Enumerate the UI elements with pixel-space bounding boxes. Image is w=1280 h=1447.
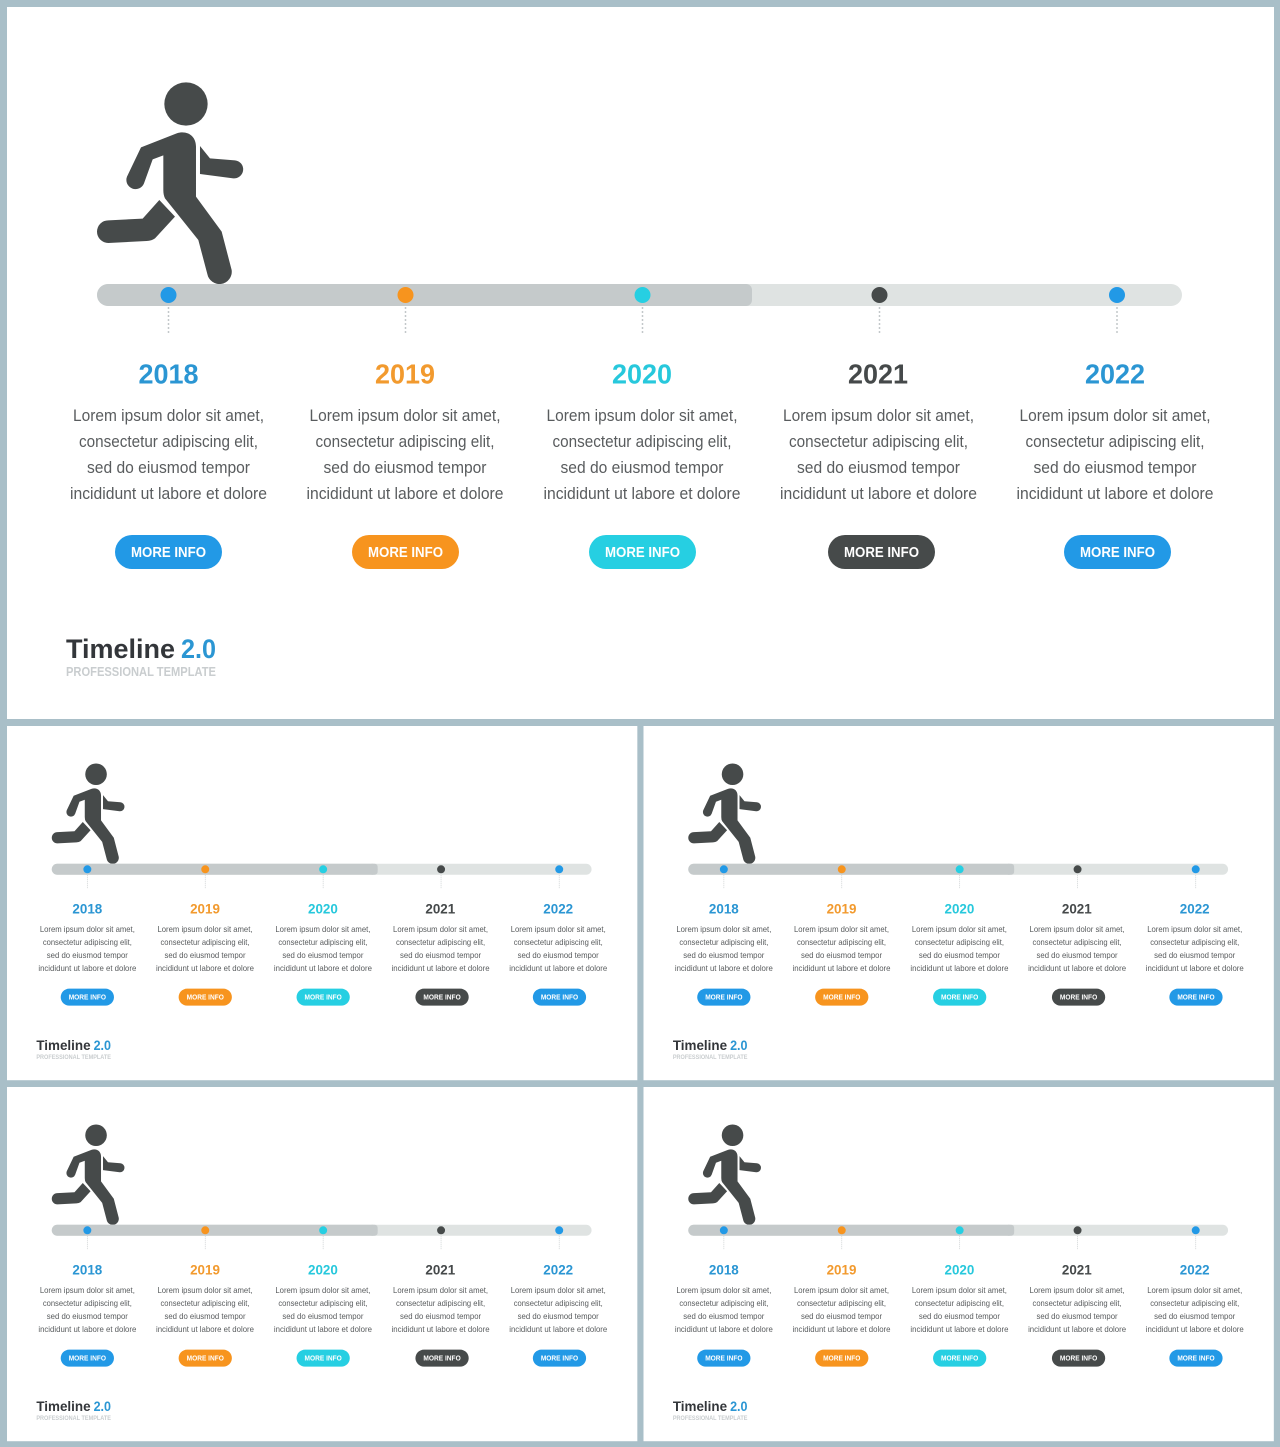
column: 2019: incididunt ut labore et dolore	[156, 1325, 254, 1334]
column: 2019: Lorem ipsum dolor sit amet,	[794, 925, 889, 934]
column: 2018: sed do eiusmod tempor	[683, 951, 765, 960]
column: 2021: consectetur adipiscing elit,	[396, 1299, 485, 1308]
column: 2020	[910, 900, 1009, 1006]
column: 2019: 2019	[827, 900, 857, 916]
title: 2.0	[94, 1399, 111, 1414]
title: PROFESSIONAL TEMPLATE	[66, 665, 216, 679]
column: 2020: MORE INFO	[941, 1354, 979, 1363]
column: 2018: MORE INFO	[69, 1354, 106, 1363]
title: 2.0	[730, 1038, 747, 1053]
column: 2018: incididunt ut labore et dolore	[38, 1325, 137, 1334]
column: 2022: 2022	[1180, 900, 1210, 916]
column: 2019: incididunt ut labore et dolore	[306, 485, 504, 503]
column: 2022	[1146, 1261, 1244, 1367]
column: 2021	[780, 358, 977, 569]
column: 2019: consectetur adipiscing elit,	[160, 1299, 250, 1308]
panel: small slide bottom right	[644, 1087, 1274, 1441]
column: 2021: incididunt ut labore et dolore	[1028, 964, 1126, 973]
column: 2020: Lorem ipsum dolor sit amet,	[275, 925, 370, 934]
column: 2021: incididunt ut labore et dolore	[1028, 1325, 1126, 1334]
column: 2021: sed do eiusmod tempor	[1037, 1312, 1118, 1321]
column: 2020: Lorem ipsum dolor sit amet,	[912, 925, 1007, 934]
column: 2021: Lorem ipsum dolor sit amet,	[783, 407, 974, 425]
column: 2022: Lorem ipsum dolor sit amet,	[511, 925, 606, 934]
column: 2019	[156, 1261, 254, 1367]
column: 2020: consectetur adipiscing elit,	[915, 1299, 1004, 1308]
column: 2021: MORE INFO	[1060, 993, 1098, 1002]
column: 2020: 2020	[944, 900, 975, 916]
column: 2021: MORE INFO	[423, 993, 461, 1002]
column: 2019	[306, 358, 504, 569]
panel: small slide top left	[7, 726, 637, 1080]
column: 2018: Lorem ipsum dolor sit amet,	[676, 1286, 771, 1295]
column: 2020: sed do eiusmod tempor	[282, 951, 364, 960]
column: 2020	[544, 358, 740, 569]
column: 2018: consectetur adipiscing elit,	[43, 1299, 132, 1308]
title	[36, 1038, 111, 1061]
column: 2018: sed do eiusmod tempor	[87, 459, 250, 477]
column: 2019: 2019	[190, 1261, 220, 1277]
column: 2020	[274, 900, 372, 1006]
column: 2018	[38, 900, 137, 1006]
column: 2020: consectetur adipiscing elit,	[915, 938, 1004, 947]
column: 2021: MORE INFO	[844, 545, 919, 561]
column: 2022: incididunt ut labore et dolore	[1146, 1325, 1244, 1334]
column: 2021: incididunt ut labore et dolore	[392, 964, 490, 973]
column: 2019: consectetur adipiscing elit,	[316, 433, 494, 451]
column: 2018	[38, 1261, 137, 1367]
column: 2018: incididunt ut labore et dolore	[675, 964, 773, 973]
column: 2020: consectetur adipiscing elit,	[278, 938, 367, 947]
column: 2021: 2021	[848, 358, 908, 390]
column: 2021: MORE INFO	[1060, 1354, 1098, 1363]
timeline bar	[688, 864, 1228, 889]
column: 2022: Lorem ipsum dolor sit amet,	[511, 1286, 606, 1295]
column: 2020: MORE INFO	[605, 545, 680, 561]
column: 2019: sed do eiusmod tempor	[324, 459, 487, 477]
column: 2021: incididunt ut labore et dolore	[392, 1325, 490, 1334]
title: PROFESSIONAL TEMPLATE	[36, 1054, 111, 1061]
column: 2021: sed do eiusmod tempor	[797, 459, 960, 477]
column: 2020: incididunt ut labore et dolore	[910, 964, 1009, 973]
column: 2022: MORE INFO	[1177, 993, 1215, 1002]
column: 2019: incididunt ut labore et dolore	[793, 1325, 891, 1334]
column: 2021: 2021	[1062, 900, 1092, 916]
column: 2020: sed do eiusmod tempor	[919, 951, 1000, 960]
column: 2019: incididunt ut labore et dolore	[793, 964, 891, 973]
column: 2021: consectetur adipiscing elit,	[789, 433, 968, 451]
column: 2018: MORE INFO	[131, 545, 206, 561]
title: 2.0	[730, 1399, 747, 1414]
column: 2018: consectetur adipiscing elit,	[43, 938, 132, 947]
column: 2018: Lorem ipsum dolor sit amet,	[73, 407, 264, 425]
panel: small slide top right	[644, 726, 1274, 1080]
column: 2022: Lorem ipsum dolor sit amet,	[1147, 1286, 1242, 1295]
column: 2018: consectetur adipiscing elit,	[679, 1299, 768, 1308]
column: 2022	[1016, 358, 1214, 569]
column: 2021: Lorem ipsum dolor sit amet,	[393, 1286, 488, 1295]
column: 2022	[509, 1261, 608, 1367]
column: 2018: MORE INFO	[705, 1354, 743, 1363]
column: 2019: Lorem ipsum dolor sit amet,	[157, 925, 253, 934]
column: 2021: 2021	[425, 900, 455, 916]
column: 2019: consectetur adipiscing elit,	[160, 938, 250, 947]
column: 2018	[70, 358, 267, 569]
column: 2018: consectetur adipiscing elit,	[679, 938, 768, 947]
column: 2019: MORE INFO	[187, 1354, 224, 1363]
column: 2020: sed do eiusmod tempor	[919, 1312, 1000, 1321]
column: 2020: 2020	[308, 900, 338, 916]
column: 2019: consectetur adipiscing elit,	[797, 938, 886, 947]
column: 2021: consectetur adipiscing elit,	[396, 938, 485, 947]
column: 2021: consectetur adipiscing elit,	[1033, 938, 1122, 947]
column: 2019: MORE INFO	[187, 993, 224, 1002]
timeline bar	[52, 864, 592, 889]
column: 2020: Lorem ipsum dolor sit amet,	[546, 407, 738, 425]
column: 2022: incididunt ut labore et dolore	[1146, 964, 1244, 973]
column: 2021: sed do eiusmod tempor	[400, 951, 481, 960]
column: 2022: sed do eiusmod tempor	[1034, 459, 1197, 477]
title	[673, 1038, 747, 1061]
column: 2022: consectetur adipiscing elit,	[1150, 938, 1239, 947]
column: 2020: MORE INFO	[305, 993, 342, 1002]
column: 2022: MORE INFO	[1080, 545, 1155, 561]
column: 2018	[675, 1261, 773, 1367]
column: 2020: MORE INFO	[941, 993, 979, 1002]
column: 2019: MORE INFO	[823, 993, 861, 1002]
column: 2018: incididunt ut labore et dolore	[675, 1325, 773, 1334]
title: 2.0	[181, 634, 216, 664]
column: 2018: consectetur adipiscing elit,	[79, 433, 258, 451]
column: 2022: incididunt ut labore et dolore	[509, 1325, 608, 1334]
column: 2022: 2022	[1085, 358, 1145, 390]
column: 2022: incididunt ut labore et dolore	[1016, 485, 1214, 503]
icon: running person	[688, 763, 761, 864]
column: 2019: Lorem ipsum dolor sit amet,	[157, 1286, 253, 1295]
title: PROFESSIONAL TEMPLATE	[36, 1415, 111, 1422]
column: 2019	[793, 900, 891, 1006]
column: 2022: 2022	[543, 1261, 573, 1277]
column: 2021: sed do eiusmod tempor	[1037, 951, 1118, 960]
column: 2020: 2020	[944, 1261, 975, 1277]
column: 2020	[274, 1261, 372, 1367]
column: 2021: MORE INFO	[423, 1354, 461, 1363]
column: 2021	[1028, 1261, 1126, 1367]
column: 2021	[1028, 900, 1126, 1006]
column: 2018: 2018	[72, 900, 103, 916]
column: 2018: 2018	[709, 900, 739, 916]
column: 2018: MORE INFO	[69, 993, 106, 1002]
column: 2018: 2018	[709, 1261, 739, 1277]
column: 2019	[793, 1261, 891, 1367]
column: 2022	[509, 900, 608, 1006]
column: 2022: consectetur adipiscing elit,	[514, 938, 603, 947]
column: 2020: sed do eiusmod tempor	[282, 1312, 364, 1321]
timeline bar	[688, 1225, 1228, 1250]
title: 2.0	[94, 1038, 111, 1053]
title: PROFESSIONAL TEMPLATE	[673, 1415, 747, 1422]
column: 2020: Lorem ipsum dolor sit amet,	[275, 1286, 370, 1295]
title	[66, 634, 216, 679]
column: 2019: Lorem ipsum dolor sit amet,	[310, 407, 500, 425]
column: 2019: 2019	[827, 1261, 857, 1277]
column: 2019: incididunt ut labore et dolore	[156, 964, 254, 973]
panel: large timeline slide	[7, 7, 1274, 719]
column: 2019: consectetur adipiscing elit,	[797, 1299, 886, 1308]
column: 2022: 2022	[1180, 1261, 1210, 1277]
column: 2022: 2022	[543, 900, 573, 916]
column: 2020: incididunt ut labore et dolore	[910, 1325, 1009, 1334]
column: 2019: Lorem ipsum dolor sit amet,	[794, 1286, 889, 1295]
column: 2018: Lorem ipsum dolor sit amet,	[676, 925, 771, 934]
icon: running person	[688, 1124, 761, 1225]
column: 2018	[675, 900, 773, 1006]
column: 2020: Lorem ipsum dolor sit amet,	[912, 1286, 1007, 1295]
title: Timeline	[673, 1038, 727, 1053]
icon: running person	[52, 1124, 125, 1225]
title: PROFESSIONAL TEMPLATE	[673, 1054, 747, 1061]
column: 2019: MORE INFO	[368, 545, 443, 561]
column: 2018: 2018	[138, 358, 198, 390]
column: 2018: incididunt ut labore et dolore	[70, 485, 267, 503]
column: 2020: 2020	[308, 1261, 338, 1277]
column: 2020: sed do eiusmod tempor	[560, 459, 724, 477]
column: 2021: Lorem ipsum dolor sit amet,	[1030, 925, 1125, 934]
column: 2018: Lorem ipsum dolor sit amet,	[40, 1286, 135, 1295]
column: 2021: 2021	[1062, 1261, 1092, 1277]
column: 2021: Lorem ipsum dolor sit amet,	[393, 925, 488, 934]
column: 2022: MORE INFO	[541, 1354, 578, 1363]
column: 2020: 2020	[612, 358, 672, 390]
column: 2019: 2019	[190, 900, 220, 916]
title: Timeline	[673, 1399, 727, 1414]
column: 2019: sed do eiusmod tempor	[801, 1312, 882, 1321]
column: 2022: consectetur adipiscing elit,	[1026, 433, 1204, 451]
column: 2018: incididunt ut labore et dolore	[38, 964, 137, 973]
column: 2021: incididunt ut labore et dolore	[780, 485, 977, 503]
column: 2018: sed do eiusmod tempor	[47, 951, 128, 960]
column: 2018: MORE INFO	[705, 993, 743, 1002]
column: 2021: 2021	[425, 1261, 455, 1277]
timeline bar	[52, 1225, 592, 1250]
column: 2022: Lorem ipsum dolor sit amet,	[1147, 925, 1242, 934]
timeline bar	[97, 284, 1182, 334]
column: 2019	[156, 900, 254, 1006]
title: Timeline	[36, 1399, 91, 1414]
column: 2020: incididunt ut labore et dolore	[274, 964, 372, 973]
column: 2020: consectetur adipiscing elit,	[552, 433, 732, 451]
column: 2020	[910, 1261, 1009, 1367]
column: 2022: incididunt ut labore et dolore	[509, 964, 608, 973]
column: 2018: sed do eiusmod tempor	[47, 1312, 128, 1321]
column: 2019: MORE INFO	[823, 1354, 861, 1363]
panel: small slide bottom left	[7, 1087, 637, 1441]
column: 2019: sed do eiusmod tempor	[164, 1312, 246, 1321]
title: Timeline	[66, 634, 175, 664]
column: 2021	[392, 1261, 490, 1367]
column: 2020: consectetur adipiscing elit,	[278, 1299, 367, 1308]
column: 2022: Lorem ipsum dolor sit amet,	[1020, 407, 1210, 425]
column: 2019: sed do eiusmod tempor	[801, 951, 882, 960]
column: 2021: sed do eiusmod tempor	[400, 1312, 481, 1321]
column: 2018: 2018	[72, 1261, 103, 1277]
icon: running person	[52, 763, 125, 864]
column: 2019: 2019	[375, 358, 435, 390]
column: 2022	[1146, 900, 1244, 1006]
column: 2021: consectetur adipiscing elit,	[1033, 1299, 1122, 1308]
icon: running person	[97, 82, 243, 284]
column: 2022: sed do eiusmod tempor	[1154, 951, 1236, 960]
column: 2022: MORE INFO	[541, 993, 578, 1002]
column: 2020: MORE INFO	[305, 1354, 342, 1363]
column: 2021	[392, 900, 490, 1006]
column: 2018: sed do eiusmod tempor	[683, 1312, 765, 1321]
column: 2022: sed do eiusmod tempor	[1154, 1312, 1236, 1321]
column: 2019: sed do eiusmod tempor	[164, 951, 246, 960]
title	[673, 1399, 747, 1422]
title	[36, 1399, 111, 1422]
column: 2022: consectetur adipiscing elit,	[1150, 1299, 1239, 1308]
column: 2018: Lorem ipsum dolor sit amet,	[40, 925, 135, 934]
column: 2022: sed do eiusmod tempor	[518, 1312, 599, 1321]
column: 2022: consectetur adipiscing elit,	[514, 1299, 603, 1308]
column: 2020: incididunt ut labore et dolore	[544, 485, 740, 503]
title: Timeline	[36, 1038, 91, 1053]
column: 2022: MORE INFO	[1177, 1354, 1215, 1363]
column: 2021: Lorem ipsum dolor sit amet,	[1030, 1286, 1125, 1295]
column: 2022: sed do eiusmod tempor	[518, 951, 599, 960]
column: 2020: incididunt ut labore et dolore	[274, 1325, 372, 1334]
